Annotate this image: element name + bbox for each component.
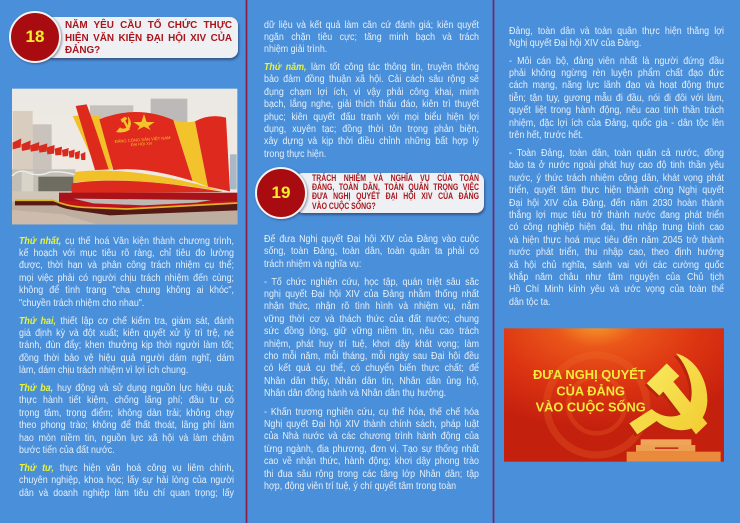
text block: column 2 continuation: dữ liệu và kết quả làm căn cứ đánh giá; kiên quyết: [264, 20, 479, 30]
text block: duty 2: từng ngành, địa phương, đơn vị. Tạo sự thống nhất: [264, 444, 479, 455]
text block: duty 3: - Mỗi cán bộ, đảng viên nhất là người đứng đầu: [509, 56, 724, 66]
text block: intro 19: sống, toàn Đảng, toàn dân, toàn quân ta phải có: [264, 246, 479, 257]
text block: intro 19: trách nhiệm và nghĩa vụ:: [264, 259, 362, 270]
text block: duty 3: tiễn; tận tụy, gương mẫu đi đầu, nói đi đôi với làm,: [509, 93, 724, 104]
text block: column 2 continuation: [264, 20, 479, 55]
text block: Thứ năm: xây dựng và kịp thời điều chỉnh những bất hợp lý: [264, 136, 479, 147]
text block: Thứ ba: trọng tâm, trọng điểm; không dàn trải; không chạy: [19, 408, 234, 419]
text block: duty 2: Nghị quyết Đại hội XIV thành chính sách, pháp luật: [264, 419, 479, 430]
heading: question 18: [8, 10, 240, 66]
text block: duty 1: vững thời cơ và thách thức của đất nước; chung: [264, 314, 479, 325]
text block: Thứ hai: tránh, đùn đẩy; khen thưởng kịp thời người làm tốt;: [19, 340, 234, 351]
text block: duty 1: nhiệm, phát huy trí tuệ, khơi dậy khát vọng; làm: [264, 339, 479, 350]
text block: duty 1: Nhân dân đồng hành và Nhân dân thụ hưởng.: [264, 388, 447, 399]
number badge 19: 19: [272, 183, 290, 202]
text block: duty 1: sức đồng lòng, giữ vững niềm tin, nêu cao trách: [264, 326, 479, 337]
text block: Thứ tư: Thứ tư, thực hiện văn hoá công vụ liêm chính,: [19, 463, 234, 474]
text block: column 2 continuation: nhiệm giải trình.: [264, 44, 328, 55]
text block: Thứ tư: chuyên nghiệp, khoa học; lấy sự hài lòng của người: [19, 475, 234, 486]
heading text 18: NĂM YÊU CẦU TỔ CHỨC THỰC: [65, 19, 232, 31]
heading text 18: HIỆN VĂN KIỆN ĐẠI HỘI XIV CỦA: [65, 32, 232, 44]
hammer and sickle emblem: [627, 353, 707, 437]
text block: Thứ hai: Thứ hai, thiết lập cơ chế kiểm tra, giám sát, đánh: [19, 316, 234, 326]
text block: Thứ nhất: kế hoạch với mục tiêu rõ ràng, chỉ tiêu đo lường: [19, 248, 234, 259]
text block: duty 4: thắng lợi mục tiêu trở thành nước đang phát triển: [509, 210, 724, 221]
text block: Thứ hai: đồng thời bảo vệ hiệu quả người dám nghĩ, dám: [19, 353, 234, 364]
monument flag: ĐẢNG CỘNG SẢN VIỆT NAM: [114, 135, 171, 144]
text block: Thứ hai: giá định kỳ và đột xuất; kiên quyết xử lý trì trệ, né: [19, 328, 234, 339]
text block: Thứ ba: hao mòn niềm tin, nguồn lực xã hội và làm chậm: [19, 433, 234, 444]
text block: Thứ hai: làm, dám chịu trách nhiệm vì lợi ích chung.: [19, 365, 188, 376]
heading text 18: [65, 18, 232, 56]
text block: duty 3: cách mạng, năng lực lãnh đạo và hoạt động thực: [509, 80, 724, 91]
poster title: [533, 367, 646, 415]
text block: duty 1: nghị quyết Đại hội XIV của Đảng nhằm thống nhất: [264, 289, 479, 300]
text block: duty 1: nhận thức, nhận rõ tình hình và nhiệm vụ, nắm: [264, 301, 479, 312]
text block: duty 1: cho mỗi năm, mỗi tháng, mỗi ngày sau Đại hội đều: [264, 351, 479, 362]
text block: duty 4: bào ta ở nước ngoài phát huy cao độ tinh thần yêu: [509, 160, 724, 171]
text block: Thứ năm: Thứ năm, làm tốt công tác thông tin, truyền thông: [264, 62, 479, 73]
number badge 18: 18: [26, 27, 44, 46]
text block: Thứ năm: [264, 62, 479, 160]
text block: Thứ năm: dụng, xuyên tạc; đồng thời tôn trọng phản biện,: [264, 124, 479, 135]
text block: Thứ năm: bảo đảm đồng thuận xã hội. Cải cách sâu rộng sẽ: [264, 74, 479, 85]
text block: duty 2: cao về nhận thức, hành động; khơi dậy phong trào: [264, 456, 479, 467]
text block: duty 4: có công nghiệp hiện đại, thu nhập trung bình cao: [509, 222, 724, 233]
heading text 19: ĐẢNG, TOÀN DÂN, TOÀN QUÂN TRONG VIỆC: [312, 182, 479, 192]
text block: duty 3: phải không ngừng rèn luyện phẩm chất đạo đức: [509, 68, 724, 79]
text block: duty 1: [264, 276, 479, 399]
text block: duty 3: [509, 56, 724, 141]
text block: Thứ năm: phục; kiên quyết đấu tranh với mọi biểu hiện lợi: [264, 112, 479, 123]
text block: duty 4: - Toàn Đảng, toàn dân, toàn quân cả nước, đồng: [509, 148, 724, 159]
text block: Thứ năm: bạch, lắng nghe, giải thích thấu đáo, kiên trì thuyết: [264, 99, 479, 110]
text block: duty 2: hợp, động viên trí tuệ, ý chí quyết tâm trong toàn: [264, 481, 456, 492]
text block: column 3 continuation: Nghị quyết Đại hội XIV của Đảng.: [509, 38, 641, 49]
poster image: hammer and sickle: [504, 328, 724, 462]
text block: duty 4: Hồ Chí Minh kính yêu và ước vọng của toàn thể: [509, 284, 724, 295]
text block: Thứ ba: Thứ ba, huy động và sử dụng nguồn lực hiệu quả;: [19, 383, 234, 394]
poster title: ĐƯA NGHỊ QUYẾT: [533, 367, 646, 382]
poster title: VÀO CUỘC SỐNG: [536, 400, 646, 415]
text block: Thứ tư: dân và doanh nghiệp làm tiêu chí quan trọng; lấy: [19, 488, 234, 499]
text block: duty 4: nước phát triển, thu nhập cao, theo định hướng: [509, 247, 724, 258]
text block: duty 2: - Khẩn trương nghiên cứu, cụ thể hóa, thể chế hóa: [264, 406, 479, 418]
text block: Thứ hai: [19, 316, 234, 376]
text block: duty 4: và hiện thực hoá mục tiêu đến năm 2045 trở thành: [509, 235, 724, 246]
heading: question 19: [254, 166, 486, 222]
monument flag: ĐẠI HỘI XIV: [131, 141, 153, 147]
text block: Thứ ba: [19, 383, 234, 456]
text block: column 3 continuation: Đảng, toàn dân và toàn quân thực hiện thắng lợi: [509, 26, 724, 36]
text block: Thứ nhất: mọi việc phải có người chịu trách nhiệm đến cùng;: [19, 273, 234, 284]
photo: party congress monument: [12, 88, 238, 224]
text block: duty 1: Nhân dân thấy, Nhân dân tin, Nhân dân ủng hộ,: [264, 376, 479, 387]
heading text 18: ĐẢNG?: [65, 44, 100, 56]
text block: duty 2: [264, 406, 479, 492]
monument base: [12, 193, 237, 224]
text block: Thứ ba: bước tiến của đất nước.: [19, 445, 115, 456]
heading text 19: VÀO CUỘC SỐNG?: [312, 201, 376, 211]
text block: Thứ ba: thực hành tiết kiệm, chống lãng phí; đầu tư có: [19, 395, 234, 406]
heading text 19: ĐƯA NGHỊ QUYẾT ĐẠI HỘI XIV CỦA ĐẢNG: [312, 191, 479, 201]
text block: duty 4: dân tộc ta.: [509, 297, 551, 308]
text block: duty 3: trên hết, trước hết.: [509, 130, 583, 141]
text block: Thứ ba: theo phong trào; không để thất thoát, lãng phí làm: [19, 420, 234, 431]
emblem pedestal: [627, 439, 721, 462]
poster title: CỦA ĐẢNG: [556, 383, 625, 398]
text block: column 3 continuation: [509, 26, 724, 49]
text block: duty 2: thi đua sâu rộng trong các tầng lớp Nhân dân; tập: [264, 469, 479, 480]
text block: Thứ nhất: Thứ nhất, cụ thể hoá Văn kiện thành chương trình,: [19, 236, 234, 246]
text block: duty 3: nhiệm, đặc lợi ích của Đảng, quốc gia - dân tộc lên: [509, 118, 724, 129]
text block: duty 1: có kết quả cụ thể, có chuyển biến thực chất; để: [264, 363, 479, 374]
text block: duty 3: quyết liệt trong hành động, nêu cao tinh thần trách: [509, 105, 724, 116]
heading text 19: [312, 172, 479, 211]
text block: duty 4: khắp năm châu như tâm nguyện của Chủ tịch: [509, 272, 724, 283]
text block: duty 1: - Tổ chức nghiên cứu, học tập, quán triệt sâu sắc: [264, 276, 479, 288]
text block: Thứ nhất: được, thời hạn và phân công trách nhiệm cụ thể;: [19, 260, 234, 271]
text block: duty 4: Đại hội XIV của Đảng, đến năm 2030 hoàn thành: [509, 198, 724, 209]
text block: Thứ nhất: "chuyền trách nhiệm cho nhau".: [19, 298, 144, 309]
text block: intro 19: [264, 234, 479, 270]
text block: duty 2: của Nhà nước và các chương trình hành động của: [264, 431, 479, 442]
text block: duty 4: [509, 148, 724, 308]
number badge 18: [9, 11, 61, 63]
text block: Thứ tư: [19, 463, 234, 499]
number badge 19: [255, 167, 307, 219]
text block: duty 4: xã hội chủ nghĩa, sánh vai với các cường quốc: [509, 260, 724, 271]
text block: Thứ năm: đụng chạm lợi ích, vì vậy phải công khai, minh: [264, 87, 479, 98]
text block: duty 4: nước, ý thức trách nhiệm công dân, khát vọng phát: [509, 173, 724, 184]
heading text 19: TRÁCH NHIỆM VÀ NGHĨA VỤ CỦA TOÀN: [312, 172, 479, 182]
text block: Thứ nhất: [19, 236, 234, 309]
text block: Thứ năm: trong thực hiện.: [264, 149, 327, 160]
text block: duty 4: triển, quyết tâm thực hiện thành công Nghị quyết: [509, 185, 724, 196]
text block: Thứ nhất: không để tình trạng "cha chung không ai khóc",: [19, 285, 234, 296]
text block: intro 19: Để đưa Nghị quyết Đại hội XIV của Đảng vào cuộc: [264, 234, 479, 245]
monument flag: [72, 104, 230, 193]
text block: column 2 continuation: ngăn chặn tiêu cực; tăng minh bạch và trách: [264, 32, 479, 43]
